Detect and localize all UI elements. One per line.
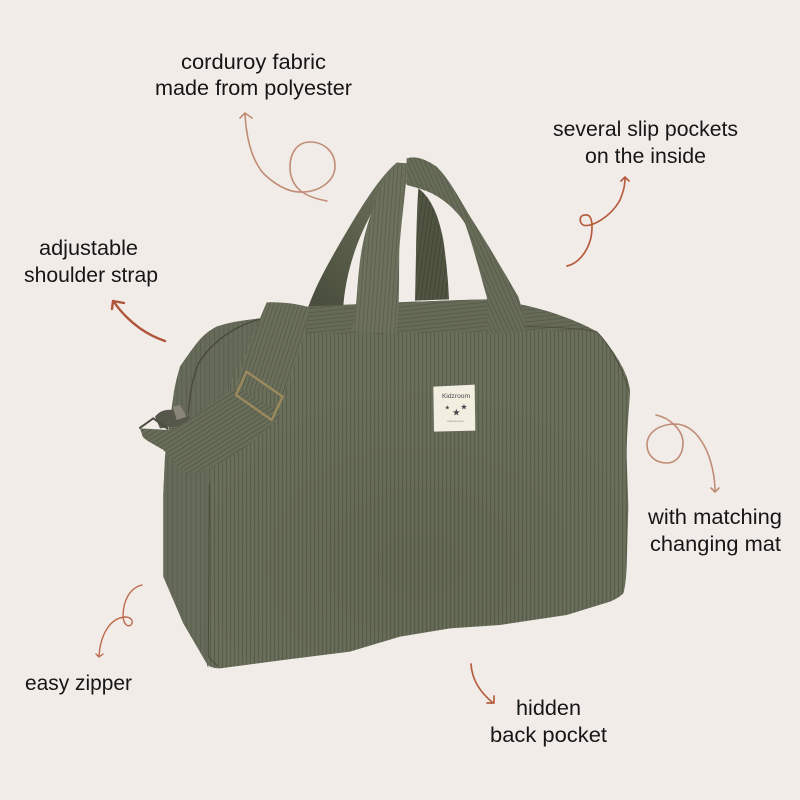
label: shoulder strap: [24, 237, 158, 287]
fabric label: DESIGN KIDS: [447, 421, 464, 423]
label: slip pockets: [553, 118, 738, 168]
fabric label: [433, 385, 475, 432]
side seam: [208, 483, 217, 666]
zipper seam: [188, 319, 260, 413]
label: changing mat: [647, 506, 782, 556]
handle: front left strap: [352, 163, 407, 333]
label: back pocket: [490, 697, 607, 747]
side panel: [163, 318, 260, 668]
label: corduroy fabric: made from polyester: [155, 77, 352, 100]
label: changing mat: with matching: [647, 506, 782, 529]
label: corduroy fabric: corduroy fabric: [181, 51, 326, 74]
callout: back pocket: [471, 664, 607, 747]
arrow: to back pocket label: [471, 664, 494, 703]
arrow: looped to changing mat label: [647, 415, 719, 492]
product photo: green corduroy bag: [139, 157, 630, 668]
label: slip pockets: on the inside: [585, 145, 706, 168]
callout: shoulder strap: [24, 237, 165, 341]
label: shoulder strap: adjustable: [39, 237, 138, 260]
shoulder strap lower: [140, 387, 282, 473]
label: corduroy fabric: [155, 51, 352, 100]
label: changing mat: changing mat: [650, 533, 781, 556]
front panel shading: [163, 299, 630, 668]
bag body: [163, 299, 630, 668]
arrow: to shoulder strap label: [112, 301, 165, 341]
arrow: looped to slip pockets label: [567, 177, 629, 266]
fabric label: ★: [460, 402, 468, 411]
callout: slip pockets: [553, 118, 738, 266]
fabric label: ★: [452, 407, 461, 418]
handle: right strap: [407, 157, 525, 334]
label: shoulder strap: shoulder strap: [24, 264, 158, 287]
shoulder strap upper: [236, 302, 309, 395]
callout: easy zipper: [25, 585, 142, 695]
label: slip pockets: several slip pockets: [553, 118, 738, 141]
label: easy zipper: easy zipper: [25, 672, 132, 695]
callout: corduroy fabric: [155, 51, 352, 201]
right seam: [525, 327, 629, 392]
top panel: [307, 299, 597, 334]
strap tail and hardware: [139, 405, 190, 429]
callout: changing mat: [647, 415, 782, 556]
label: back pocket: back pocket: [490, 724, 607, 747]
fabric label: ★: [445, 404, 450, 411]
metal buckle: [236, 372, 283, 420]
fabric label: Kidzroom: [442, 393, 470, 400]
label: back pocket: hidden: [516, 697, 581, 720]
arrow: looped to fabric label: [240, 113, 335, 201]
arrow: looped to zipper label: [96, 585, 142, 657]
handle: reverse side of left strap: [308, 163, 407, 307]
back handle: [415, 188, 449, 301]
